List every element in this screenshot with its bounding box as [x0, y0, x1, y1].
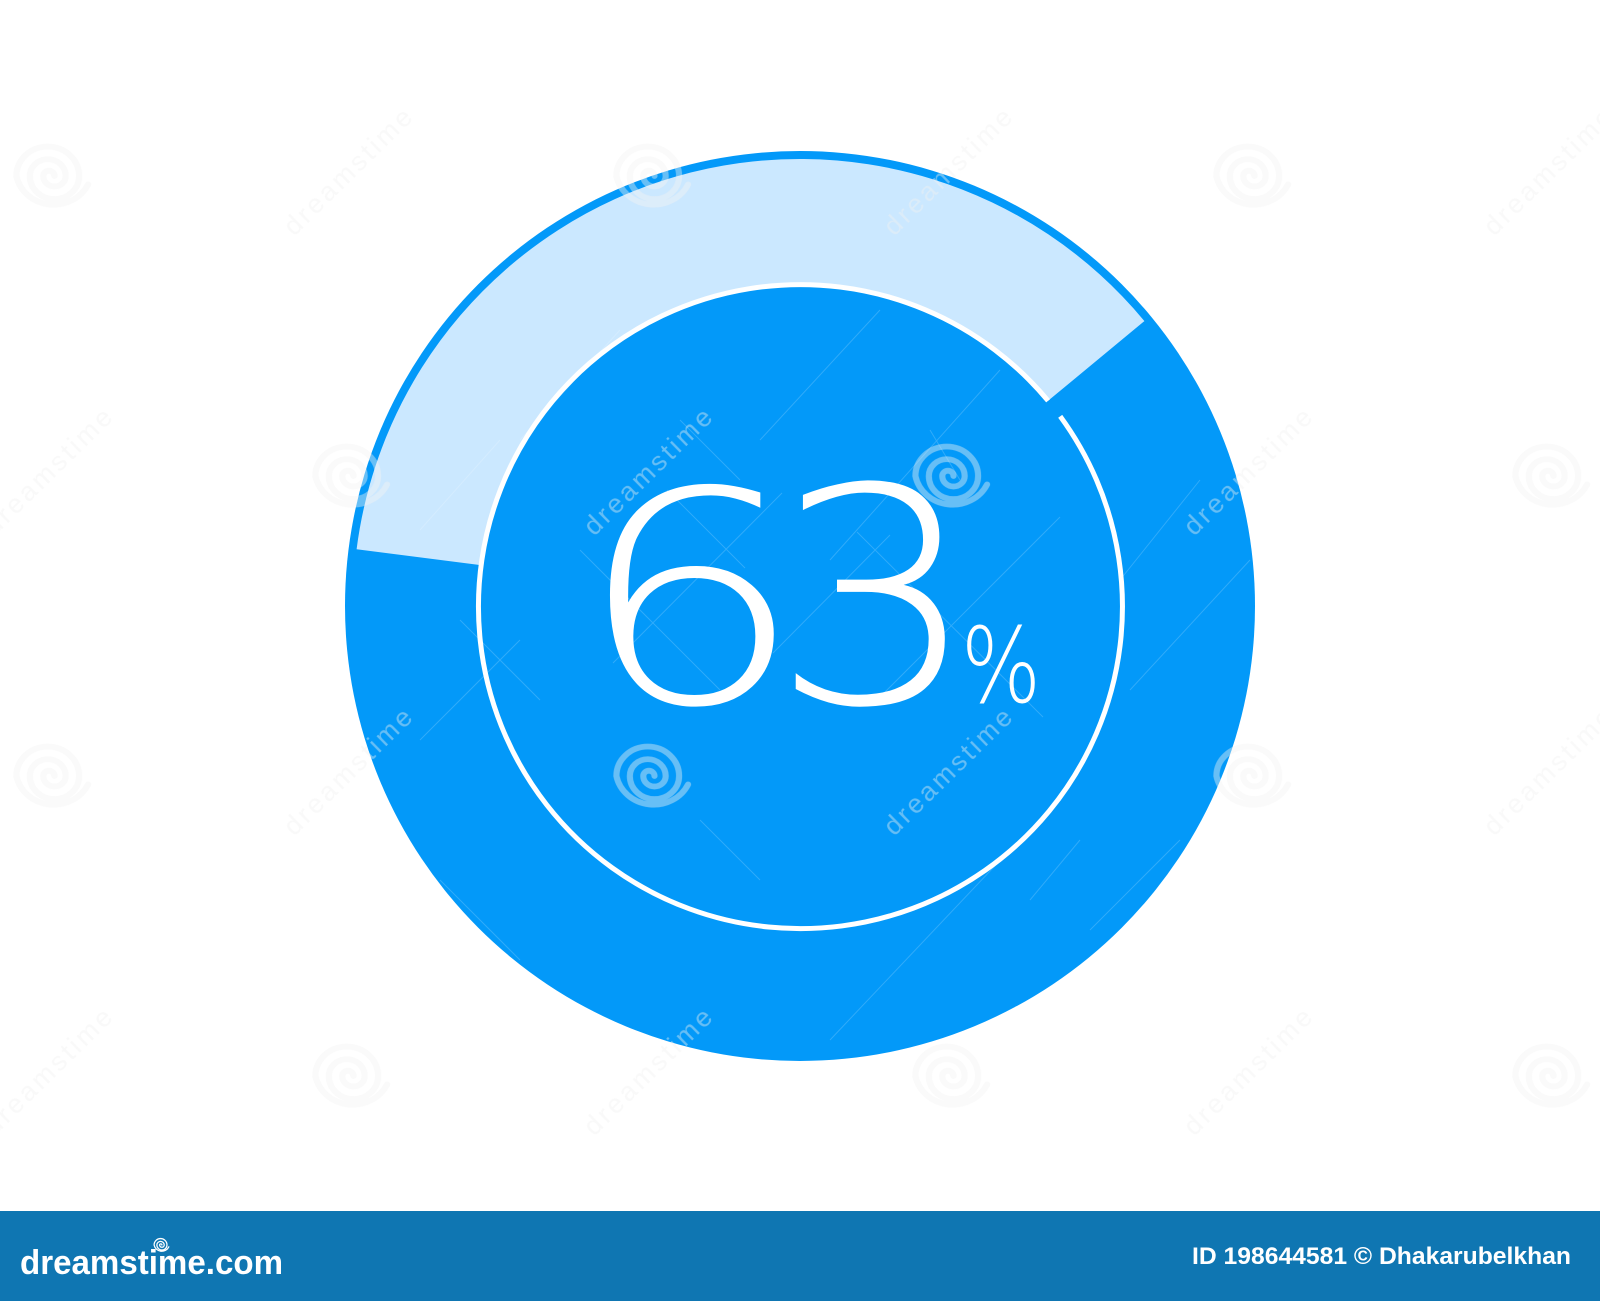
watermark text: dreamstime — [1177, 1002, 1318, 1141]
inner white ring — [478, 285, 1122, 929]
digit 3: 3 — [771, 425, 979, 773]
digit 6: 6 — [575, 430, 805, 772]
watermark text: dreamstime — [277, 702, 418, 841]
watermark text: dreamstime — [577, 1002, 718, 1141]
footer image id and credit: ID 198644581 © Dhakarubelkhan — [1192, 1243, 1571, 1270]
watermark text: dreamstime — [1177, 402, 1318, 541]
percent sign: % — [961, 605, 1041, 727]
donut chart: 63 percent — [345, 151, 1255, 1061]
footer bar — [0, 1211, 1600, 1301]
watermark text — [0, 102, 1600, 1141]
outer blue disc — [345, 151, 1255, 1061]
value label: 63% — [575, 425, 1041, 773]
watermark spirals — [16, 147, 1587, 1105]
watermark text: dreamstime — [277, 102, 418, 241]
watermark text: dreamstime — [877, 102, 1018, 241]
footer logo text: dreamstime.com — [20, 1244, 283, 1282]
watermark text: dreamstime — [577, 402, 718, 541]
footer logo spiral — [154, 1239, 169, 1251]
watermark text: dreamstime — [877, 702, 1018, 841]
remaining 37 percent light segment — [357, 159, 1144, 565]
